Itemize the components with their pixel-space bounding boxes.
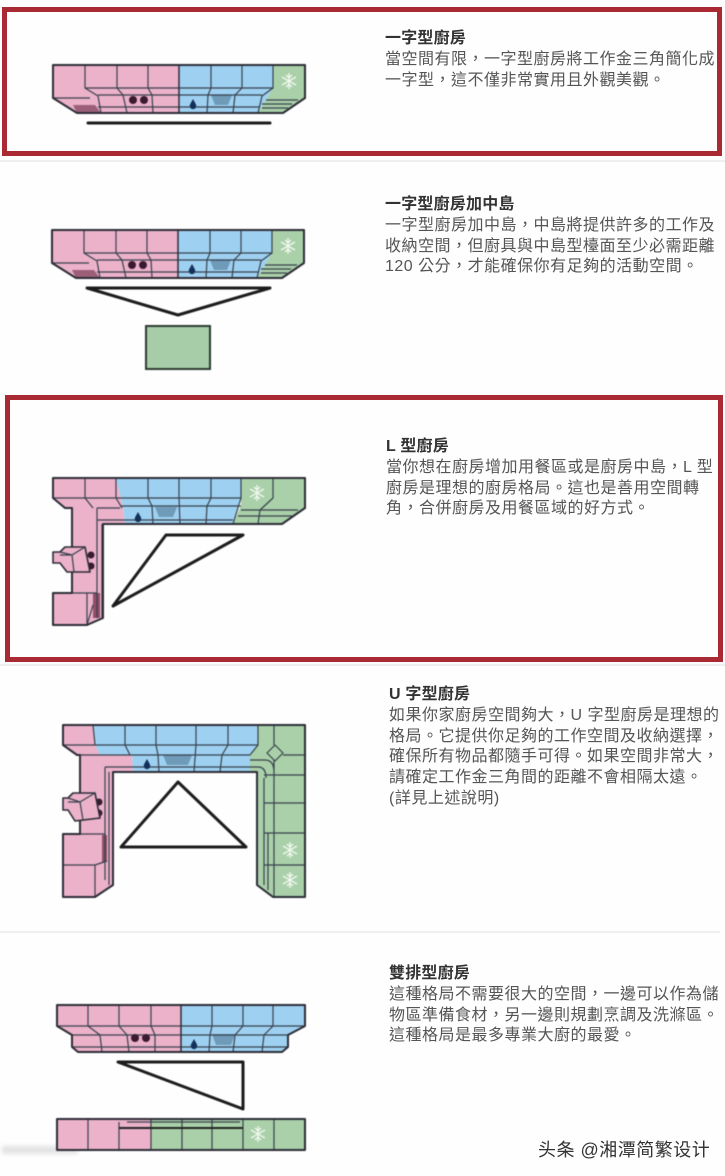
text block: one-wall kitchen with island: 一字型廚房加中島，中島將提供許多的工作及 <box>385 217 715 234</box>
cooktop bar <box>119 1127 243 1129</box>
text block: L-shaped kitchen: 角，合併廚房及用餐區域的好方式。 <box>386 500 650 517</box>
sink <box>212 1034 235 1045</box>
text block: one-wall kitchen with island: 一字型廚房加中島 <box>385 196 515 213</box>
cabinet lines <box>53 478 298 625</box>
blue cabinets <box>116 478 241 524</box>
text block: L-shaped kitchen: L 型廚房 <box>386 438 449 455</box>
work triangle <box>87 288 270 315</box>
pink cabinets <box>63 725 133 897</box>
text block: U-shaped kitchen: (詳見上述說明) <box>389 790 500 807</box>
green cabinet lines <box>250 725 305 897</box>
text block: L-shaped kitchen: 當你想在廚房增加用餐區或是廚房中島，L 型 <box>386 459 713 476</box>
range hood <box>63 793 100 821</box>
dark end panel <box>93 593 100 618</box>
upper run lines <box>57 1005 305 1052</box>
range hood <box>53 547 90 572</box>
text block: U-shaped kitchen: 如果你家廚房空間夠大，U 字型廚房是理想的 <box>389 707 720 724</box>
hood detail <box>68 793 95 820</box>
text block: U-shaped kitchen <box>389 685 720 807</box>
diagram: one-wall kitchen with island <box>52 230 304 369</box>
water drop <box>191 1039 197 1049</box>
work triangle <box>118 1062 243 1109</box>
sink <box>163 755 192 765</box>
lower run outline <box>57 1119 305 1150</box>
sink <box>155 507 177 517</box>
outline <box>53 478 305 625</box>
diagram: galley kitchen <box>57 1005 305 1150</box>
cabinet lines <box>63 725 258 897</box>
text block: one-wall kitchen with island: 120 公分，才能確保你有足夠的活動空間。 <box>385 258 699 275</box>
text block: U-shaped kitchen: 確保所有物品都隨手可得。如果空間非常大， <box>389 748 719 765</box>
diagram: U-shaped kitchen <box>63 725 305 897</box>
text block: U-shaped kitchen: 格局。它提供你足夠的工作空間及收納選擇， <box>389 728 719 745</box>
work triangle <box>113 535 243 606</box>
work triangle <box>121 782 246 847</box>
text block: one-wall kitchen with island <box>385 195 715 275</box>
island <box>146 326 210 369</box>
text block: one-wall kitchen: 一字型廚房 <box>385 30 466 47</box>
text block: one-wall kitchen with island: 收納空間，但廚具與中島型檯面至少必需距離 <box>385 238 715 255</box>
diagram: one-wall kitchen <box>53 65 305 123</box>
text block: L-shaped kitchen: 廚房是理想的廚房格局。這也是善用空間轉 <box>386 480 700 497</box>
green cabinets <box>233 478 305 524</box>
lower run lines <box>88 1119 274 1150</box>
snowflake <box>251 1126 265 1142</box>
text block: galley kitchen: 物區準備食材，另一邊則規劃烹調及洗滌區。 <box>389 1007 719 1024</box>
work line <box>88 122 270 124</box>
text block: one-wall kitchen <box>385 29 715 89</box>
lower run green <box>151 1119 305 1150</box>
panel frame: one-wall kitchen <box>2 7 722 156</box>
green cabinets <box>250 725 305 897</box>
water drop <box>144 759 150 769</box>
cabinet run <box>52 230 304 278</box>
hood detail <box>60 547 85 572</box>
cooktop burners <box>96 798 102 816</box>
cabinet run <box>53 65 305 113</box>
pink cabinets <box>53 478 125 625</box>
pink cabinets, upper run <box>57 1005 181 1052</box>
corner diamond <box>267 745 283 761</box>
dark end panel <box>102 835 107 862</box>
burners <box>131 1034 150 1042</box>
text block: one-wall kitchen: 當空間有限，一字型廚房將工作金三角簡化成 <box>385 51 715 68</box>
outline <box>63 725 305 897</box>
text block: galley kitchen: 雙排型廚房 <box>389 965 470 982</box>
text block: one-wall kitchen: 一字型，這不僅非常實用且外觀美觀。 <box>385 72 666 89</box>
snowflakes <box>283 842 297 888</box>
snowflake <box>250 485 264 501</box>
source watermark: 头条 @湘潭简繁设计 <box>538 1140 710 1160</box>
cooktop burners <box>88 552 94 570</box>
text block: galley kitchen <box>389 964 719 1044</box>
text block: L-shaped kitchen <box>386 437 713 517</box>
upper run outline <box>57 1005 305 1052</box>
text block: U-shaped kitchen: U 字型廚房 <box>389 686 470 703</box>
panel frame: L-shaped kitchen <box>5 395 723 662</box>
diagram: L-shaped kitchen <box>53 478 305 625</box>
water drop <box>135 512 141 522</box>
blue cabinets, upper run <box>181 1005 305 1052</box>
text block: U-shaped kitchen: 請確定工作金三角間的距離不會相隔太遠。 <box>389 769 703 786</box>
text block: galley kitchen: 這種格局不需要很大的空間，一邊可以作為儲 <box>389 986 719 1003</box>
blue cabinets <box>93 725 258 772</box>
lower run pink <box>57 1119 151 1150</box>
text block: galley kitchen: 這種格局是最多專業大廚的最愛。 <box>389 1027 637 1044</box>
